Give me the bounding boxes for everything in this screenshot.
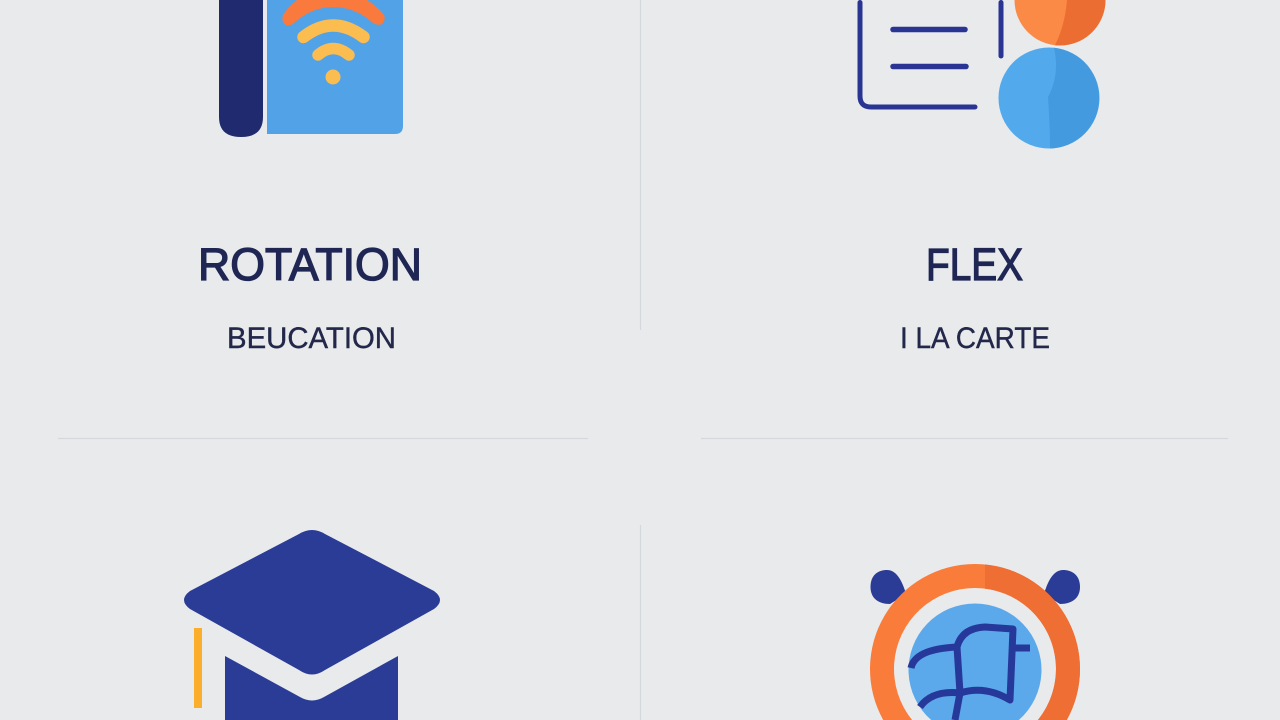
panel: rotation xyxy=(198,0,422,355)
icon: clock with window xyxy=(870,564,1080,720)
label: education: BEUCATION xyxy=(227,322,396,355)
label: a la carte: I LA CARTE xyxy=(900,322,1050,355)
icon: document with two circles xyxy=(860,0,1106,148)
heading: rotation: ROTATION xyxy=(198,239,422,290)
panel: flex xyxy=(860,0,1106,355)
icon: graduation cap xyxy=(184,530,440,720)
icon: book with wifi signal xyxy=(219,0,403,137)
heading: flex: FLEX xyxy=(926,239,1023,290)
